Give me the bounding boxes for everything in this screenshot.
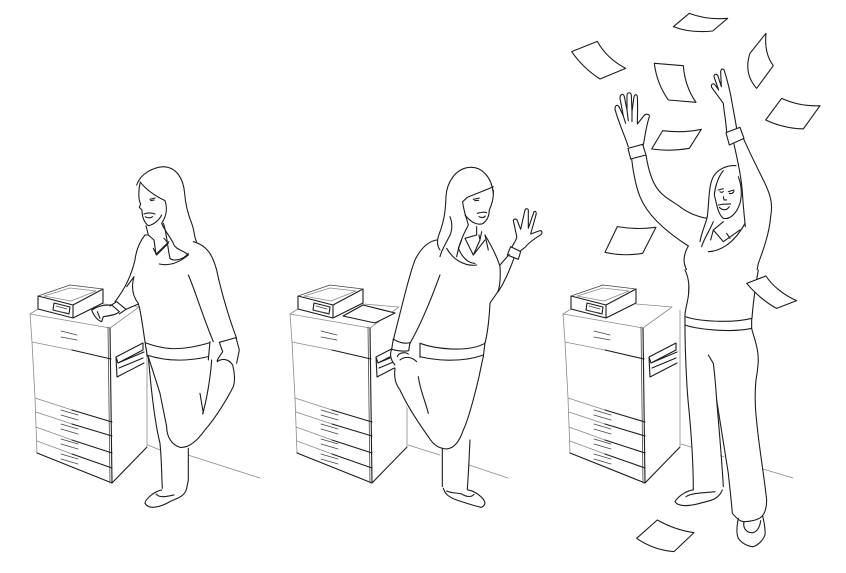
woman 3 [615,68,797,547]
woman 2 [390,167,542,507]
paper overlapping woman's hip [747,276,797,308]
flying papers [572,13,820,255]
woman 3 lower body and legs [675,270,797,547]
copier 2 [290,285,407,483]
floor line 3 [681,444,793,478]
paper stack on copier [343,305,395,323]
floor line 1 [148,445,260,478]
panel 1: woman stretching beside copier [30,167,260,508]
panel 2: woman waving beside copier [290,167,542,507]
floor line 2 [408,445,508,478]
paper on floor [637,520,694,552]
panel 3: woman throwing papers beside copier [563,13,820,552]
copier 3 [563,285,680,483]
woman 3 upper body and raised arms [615,68,772,300]
woman 1 [92,167,239,508]
copier 1 [30,285,147,483]
